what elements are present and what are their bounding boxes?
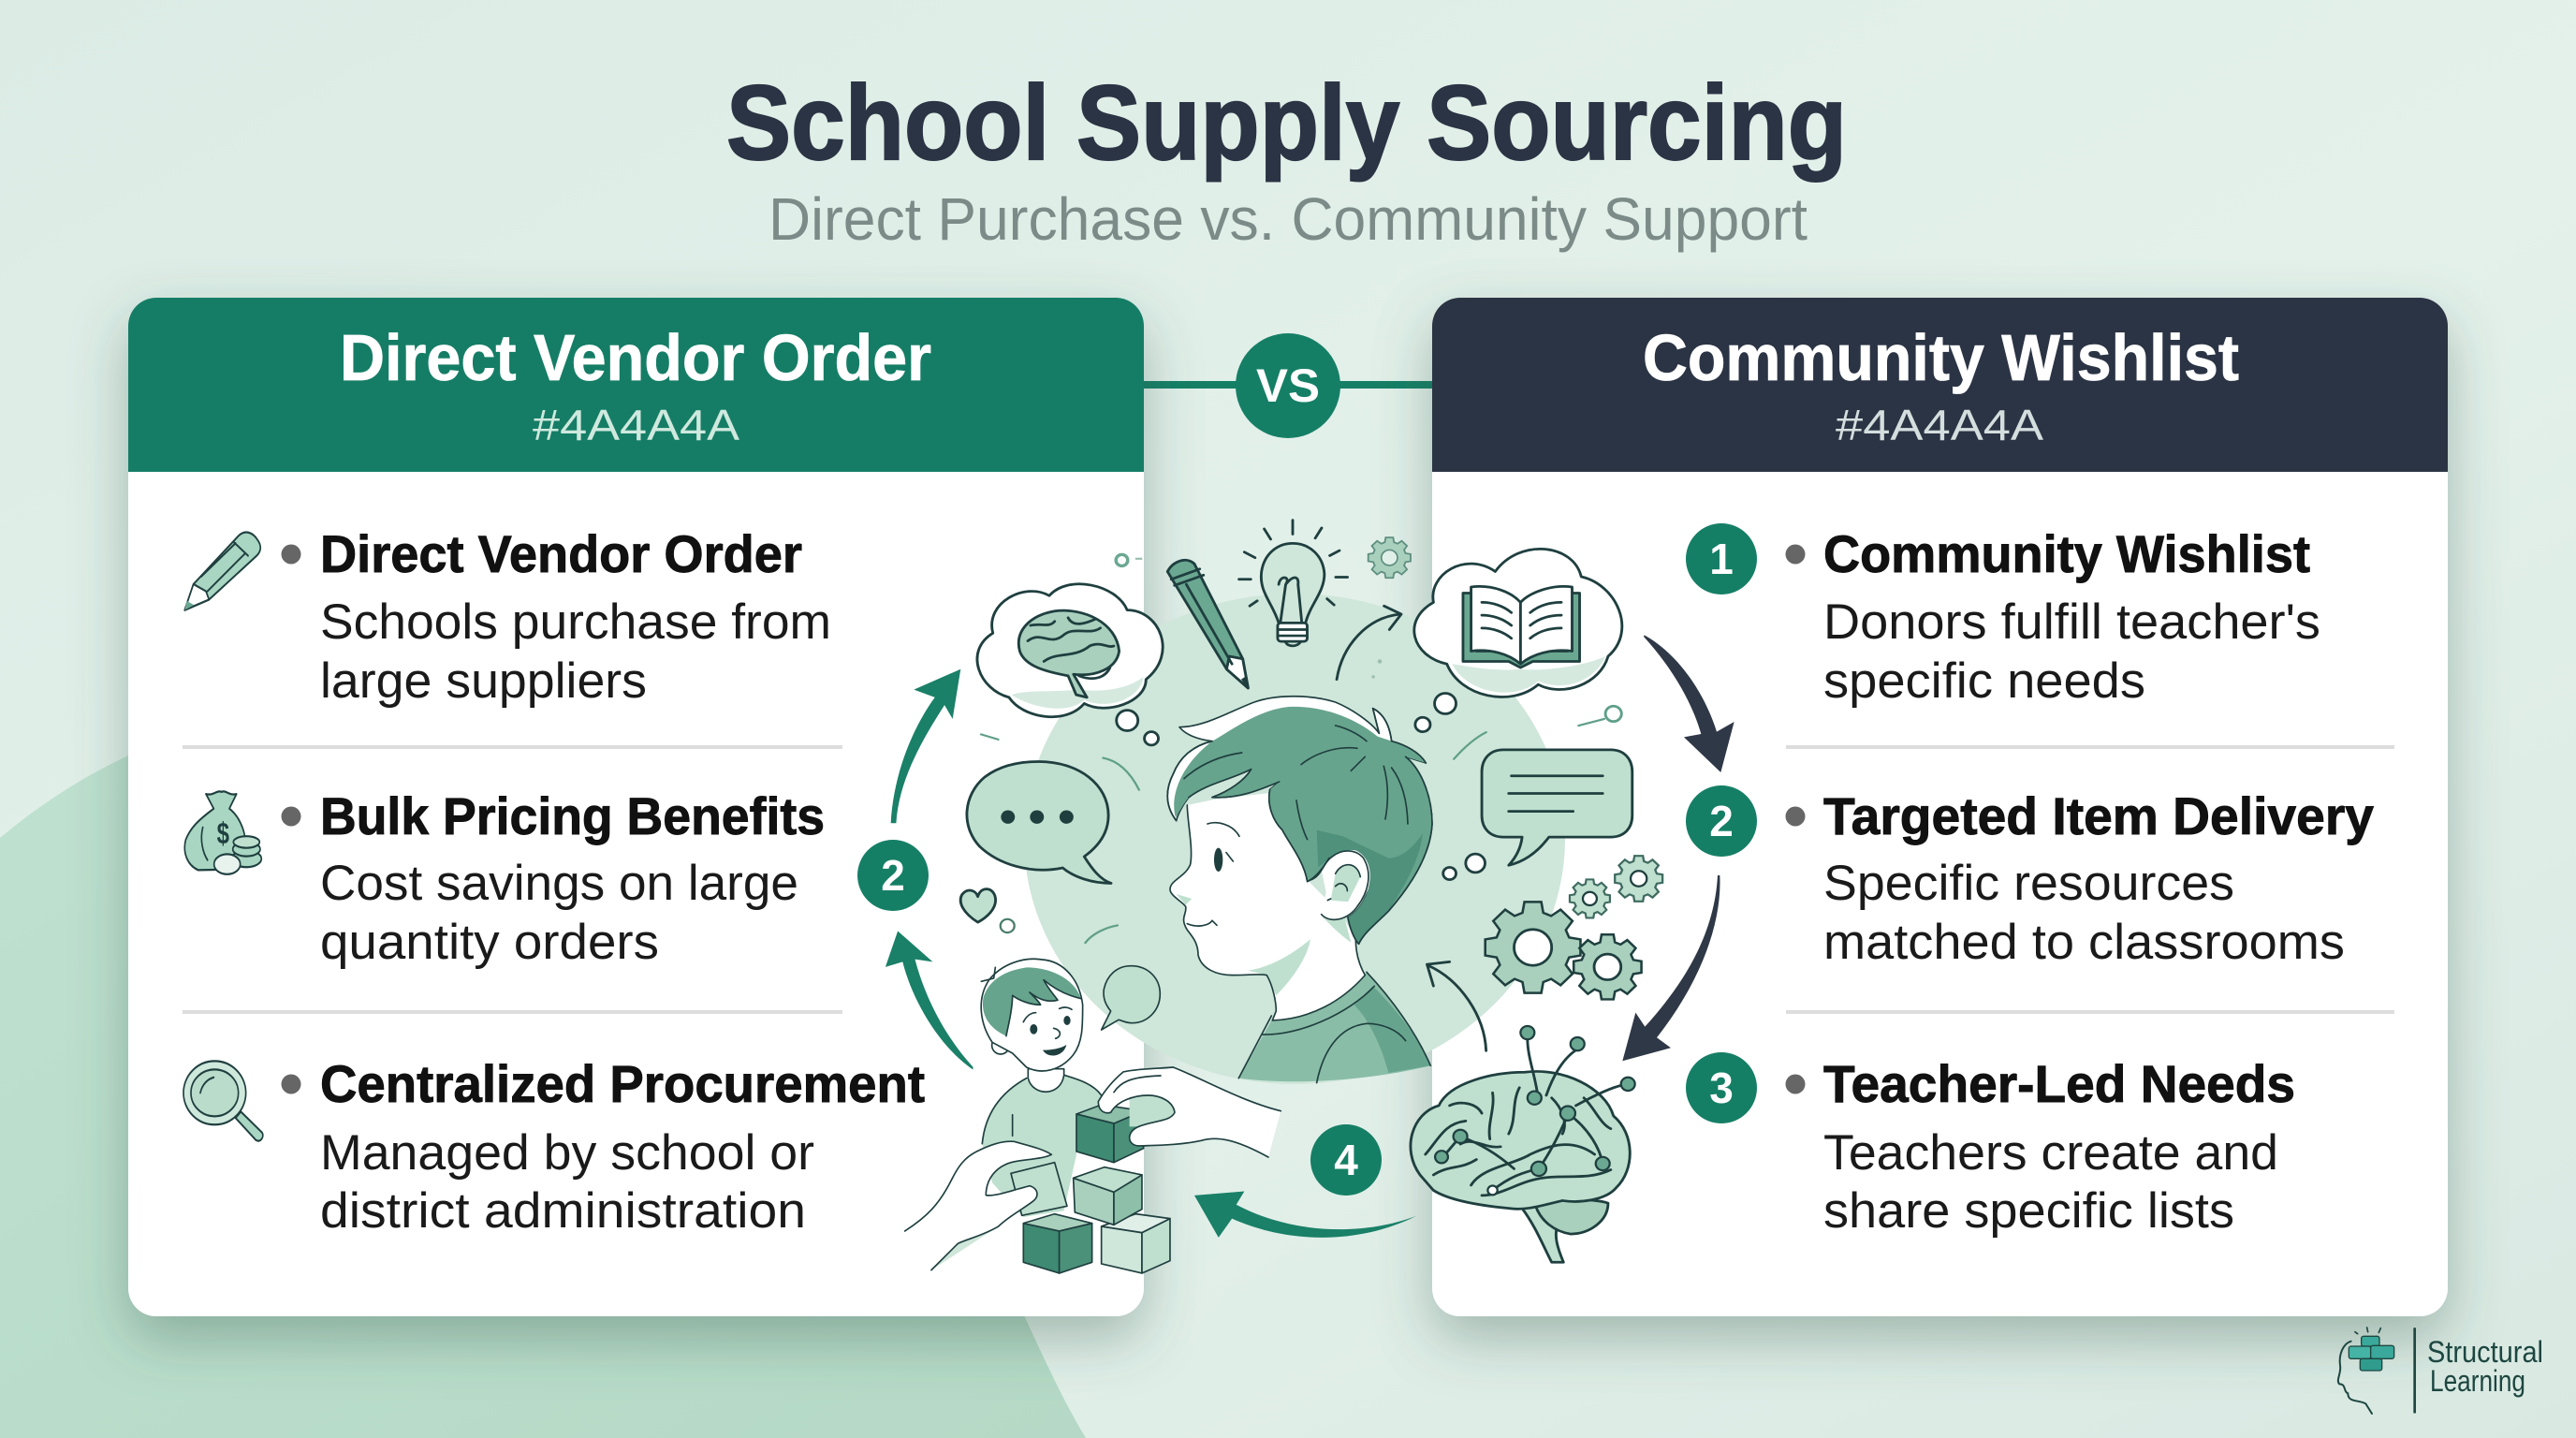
boy hair — [1167, 697, 1432, 944]
speech bubble: dots — [967, 761, 1111, 883]
gear: medium — [1573, 934, 1642, 999]
small dot connector — [1116, 554, 1142, 565]
accent ticks — [981, 659, 1621, 943]
item: targeted item delivery: Specific resources — [1823, 856, 2234, 911]
thought cloud: brain — [977, 584, 1163, 745]
badge: left 2 — [857, 840, 929, 911]
gear: small upper — [1615, 856, 1662, 902]
hand: upper right — [1098, 1067, 1281, 1157]
badge: 1: 1 — [1709, 535, 1734, 583]
icon: money bag and coins — [184, 791, 261, 874]
panel header: direct vendor order: #4A4A4A — [533, 401, 739, 449]
green arrow: lower left — [886, 931, 973, 1070]
item: community wishlist — [1786, 524, 2320, 709]
icon: magnifying glass — [183, 1061, 263, 1141]
item: community wishlist: Community Wishlist — [1823, 524, 2310, 583]
block: held — [1011, 1163, 1067, 1215]
dark arrow up to book — [1337, 606, 1401, 680]
open book — [1463, 586, 1580, 668]
item: direct vendor order: large suppliers — [320, 653, 647, 709]
speech bubble: text lines — [1443, 750, 1632, 880]
badge: 2 — [1686, 785, 1757, 857]
item: centralized procurement: Managed by school or — [320, 1125, 814, 1181]
green arrow: bottom — [1194, 1192, 1416, 1238]
boy profile — [1167, 697, 1432, 1083]
logo: structural learning — [2338, 1328, 2543, 1414]
item: bulk pricing benefits: Bulk Pricing Benefits — [320, 786, 825, 845]
child body — [982, 1069, 1102, 1217]
icon: pencil — [184, 533, 260, 610]
badge: left 2: 2 — [881, 851, 905, 900]
block: bottom right — [1102, 1214, 1170, 1273]
panel header: community wishlist — [1432, 298, 2448, 472]
central illustration — [886, 521, 1662, 1273]
panel header: community wishlist: #4A4A4A — [1836, 401, 2043, 449]
logo wordmark — [2427, 1335, 2543, 1398]
boy face — [1170, 793, 1365, 1020]
item: teacher-led needs: share specific lists — [1823, 1183, 2234, 1239]
gears cluster — [1486, 856, 1662, 999]
badge: 2: 2 — [1709, 797, 1734, 845]
badge: 3 — [1686, 1052, 1757, 1123]
pale background circle — [1024, 594, 1565, 1084]
item: community wishlist: specific needs — [1823, 653, 2145, 709]
child with blocks — [905, 959, 1281, 1273]
block: top — [1076, 1105, 1144, 1163]
logo mark — [2338, 1328, 2416, 1414]
dark arrow: lower right — [1622, 875, 1720, 1061]
green arrow: upper left — [891, 669, 960, 823]
title: School Supply Sourcing — [726, 64, 1847, 182]
item: centralized procurement: Centralized Procurement — [320, 1054, 925, 1113]
panel header: direct vendor order: Direct Vendor Order — [340, 321, 931, 394]
pencil — [1167, 560, 1248, 688]
panel: community wishlist — [1432, 298, 2448, 1316]
gear: top — [1368, 537, 1411, 578]
boy shirt — [1238, 972, 1430, 1083]
item: teacher-led needs: Teachers create and — [1823, 1125, 2278, 1181]
block: bottom left — [1023, 1214, 1092, 1273]
badge: 3: 3 — [1709, 1064, 1734, 1112]
item: teacher-led needs — [1786, 1054, 2295, 1239]
item: targeted item delivery: Targeted Item Delivery — [1823, 786, 2374, 845]
item: centralized procurement — [281, 1054, 925, 1239]
logo wordmark: Structural — [2427, 1335, 2543, 1369]
left column icons — [183, 533, 263, 1141]
child head — [981, 959, 1083, 1071]
hand: lower left — [905, 1141, 1051, 1270]
round speech bubble — [1102, 966, 1160, 1030]
gear: small lower — [1570, 879, 1610, 917]
item: direct vendor order: Schools purchase from — [320, 594, 831, 650]
block: middle — [1074, 1167, 1142, 1225]
item: direct vendor order — [281, 524, 831, 709]
logo wordmark: Learning — [2430, 1364, 2525, 1398]
vs connector: VS — [1256, 360, 1320, 412]
lightbulb — [1239, 521, 1348, 646]
item: direct vendor order: Direct Vendor Order — [320, 524, 802, 583]
item: teacher-led needs: Teacher-Led Needs — [1823, 1054, 2295, 1113]
brain with network nodes — [1411, 1026, 1635, 1262]
panel header: direct vendor order — [128, 298, 1144, 472]
vs connector — [1137, 333, 1442, 438]
small brain — [1018, 610, 1120, 697]
item: centralized procurement: district administration — [320, 1183, 806, 1239]
badge: 4: 4 — [1334, 1136, 1358, 1184]
icon: money bag and coins: $ — [217, 816, 229, 851]
item: community wishlist: Donors fulfill teacher's — [1823, 594, 2320, 650]
heart — [960, 889, 1015, 932]
item: bulk pricing benefits — [281, 786, 825, 970]
item: bulk pricing benefits: Cost savings on large — [320, 856, 798, 911]
thought cloud: open book — [1414, 549, 1622, 732]
stacked blocks — [1011, 1105, 1170, 1273]
panel: direct vendor order — [128, 298, 1144, 1316]
subtitle: Direct Purchase vs. Community Support — [768, 185, 1808, 253]
dark arrow up to boy — [1427, 961, 1486, 1050]
surrounding icons and arrows — [886, 521, 1662, 1262]
gear: large — [1486, 902, 1580, 993]
item: targeted item delivery — [1786, 786, 2374, 970]
item: bulk pricing benefits: quantity orders — [320, 915, 659, 970]
badge: 4 — [1310, 1124, 1382, 1196]
item: targeted item delivery: matched to classrooms — [1823, 915, 2345, 970]
panel header: community wishlist: Community Wishlist — [1643, 321, 2239, 394]
badge: 1 — [1686, 523, 1757, 594]
dark arrow: top right — [1644, 635, 1734, 772]
boy ear — [1310, 850, 1370, 920]
